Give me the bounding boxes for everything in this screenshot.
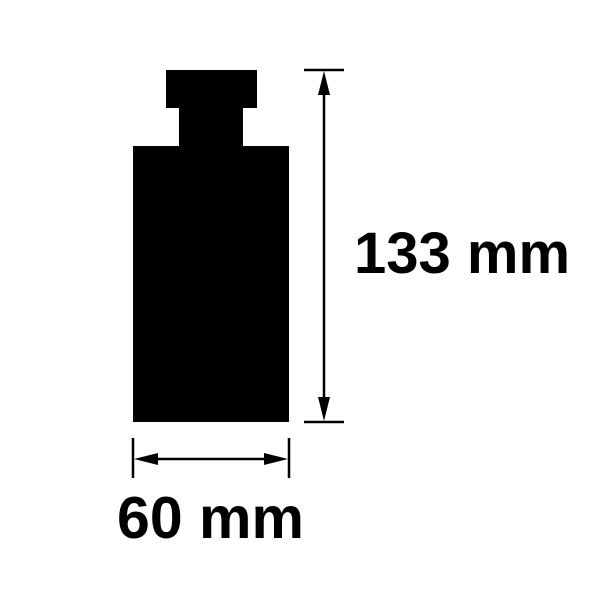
arrow: width dimension [133,438,289,478]
text: height label: 133 mm [354,221,570,286]
arrow: height dimension [304,70,344,422]
icon: bottle silhouette [133,70,289,422]
text: width label: 60 mm [117,485,304,551]
